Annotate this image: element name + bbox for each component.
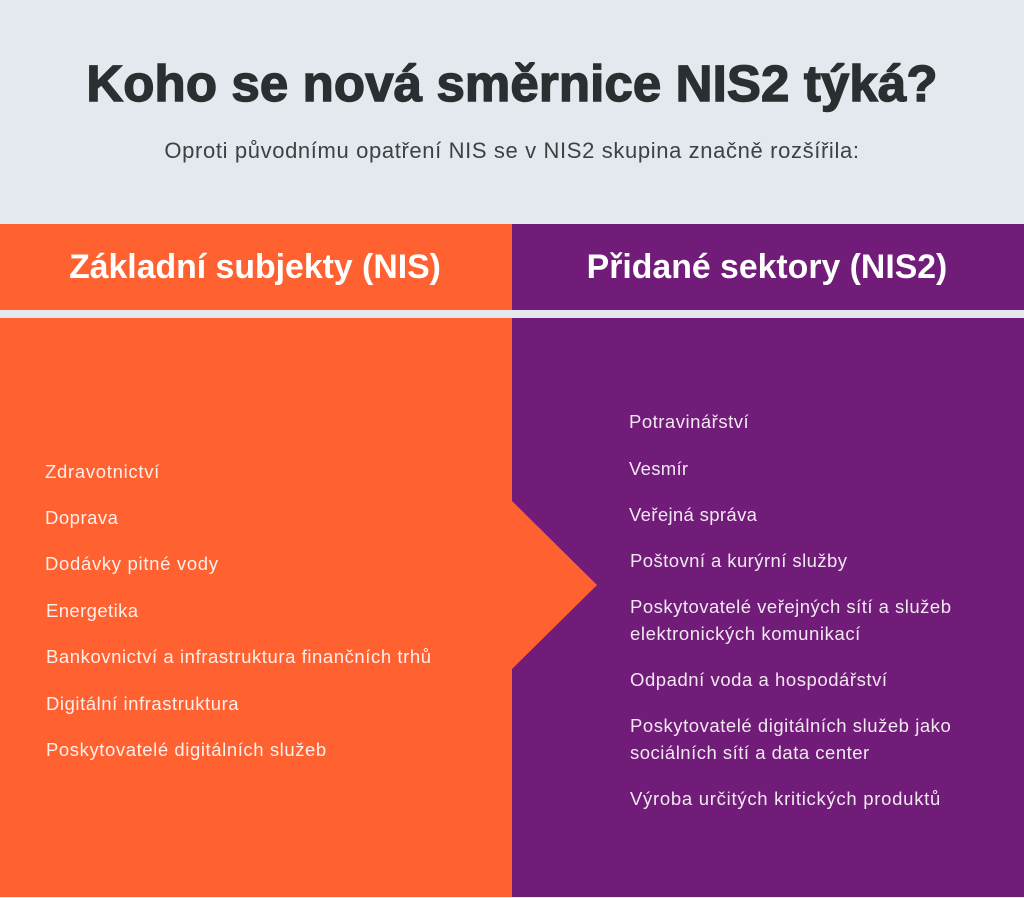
text block: left list: Dodávky pitné vody: [45, 553, 219, 574]
text block: right list: Poskytovatelé veřejných sítí a služeb: [630, 596, 951, 617]
text block: right list: Potravinářství: [629, 411, 749, 432]
text block: left list: [45, 461, 432, 760]
text block: left list: Zdravotnictví: [45, 461, 160, 482]
panel: left header: [0, 224, 512, 310]
text block: right list: Odpadní voda a hospodářství: [630, 669, 888, 690]
panel: lower columns with arrow: [0, 318, 1024, 897]
subtitle: Oproti původnímu opatření NIS se v NIS2 skupina značně rozšířila:: [164, 138, 860, 163]
text block: right list: Vesmír: [629, 458, 688, 479]
text block: right list: [629, 411, 951, 809]
heading: left column: Základní subjekty (NIS): [69, 248, 441, 286]
text block: left list: Poskytovatelé digitálních služeb: [46, 739, 327, 760]
title: Koho se nová směrnice NIS2 týká?: [86, 55, 938, 112]
text block: left list: Digitální infrastruktura: [46, 693, 239, 714]
panel: right header: [512, 224, 1024, 310]
text block: right list: Poskytovatelé digitálních služeb jako: [630, 715, 951, 736]
text block: left list: Bankovnictví a infrastruktura finančních trhů: [46, 646, 432, 667]
text block: right list: Veřejná správa: [629, 504, 757, 525]
text block: right list: sociálních sítí a data center: [630, 742, 870, 763]
text block: right list: Poštovní a kurýrní služby: [630, 550, 847, 571]
text block: left list: Doprava: [45, 507, 118, 528]
text block: right list: elektronických komunikací: [630, 623, 861, 644]
text block: right list: Výroba určitých kritických produktů: [630, 788, 941, 809]
heading: right column: Přidané sektory (NIS2): [587, 248, 947, 286]
text block: left list: Energetika: [46, 600, 138, 621]
